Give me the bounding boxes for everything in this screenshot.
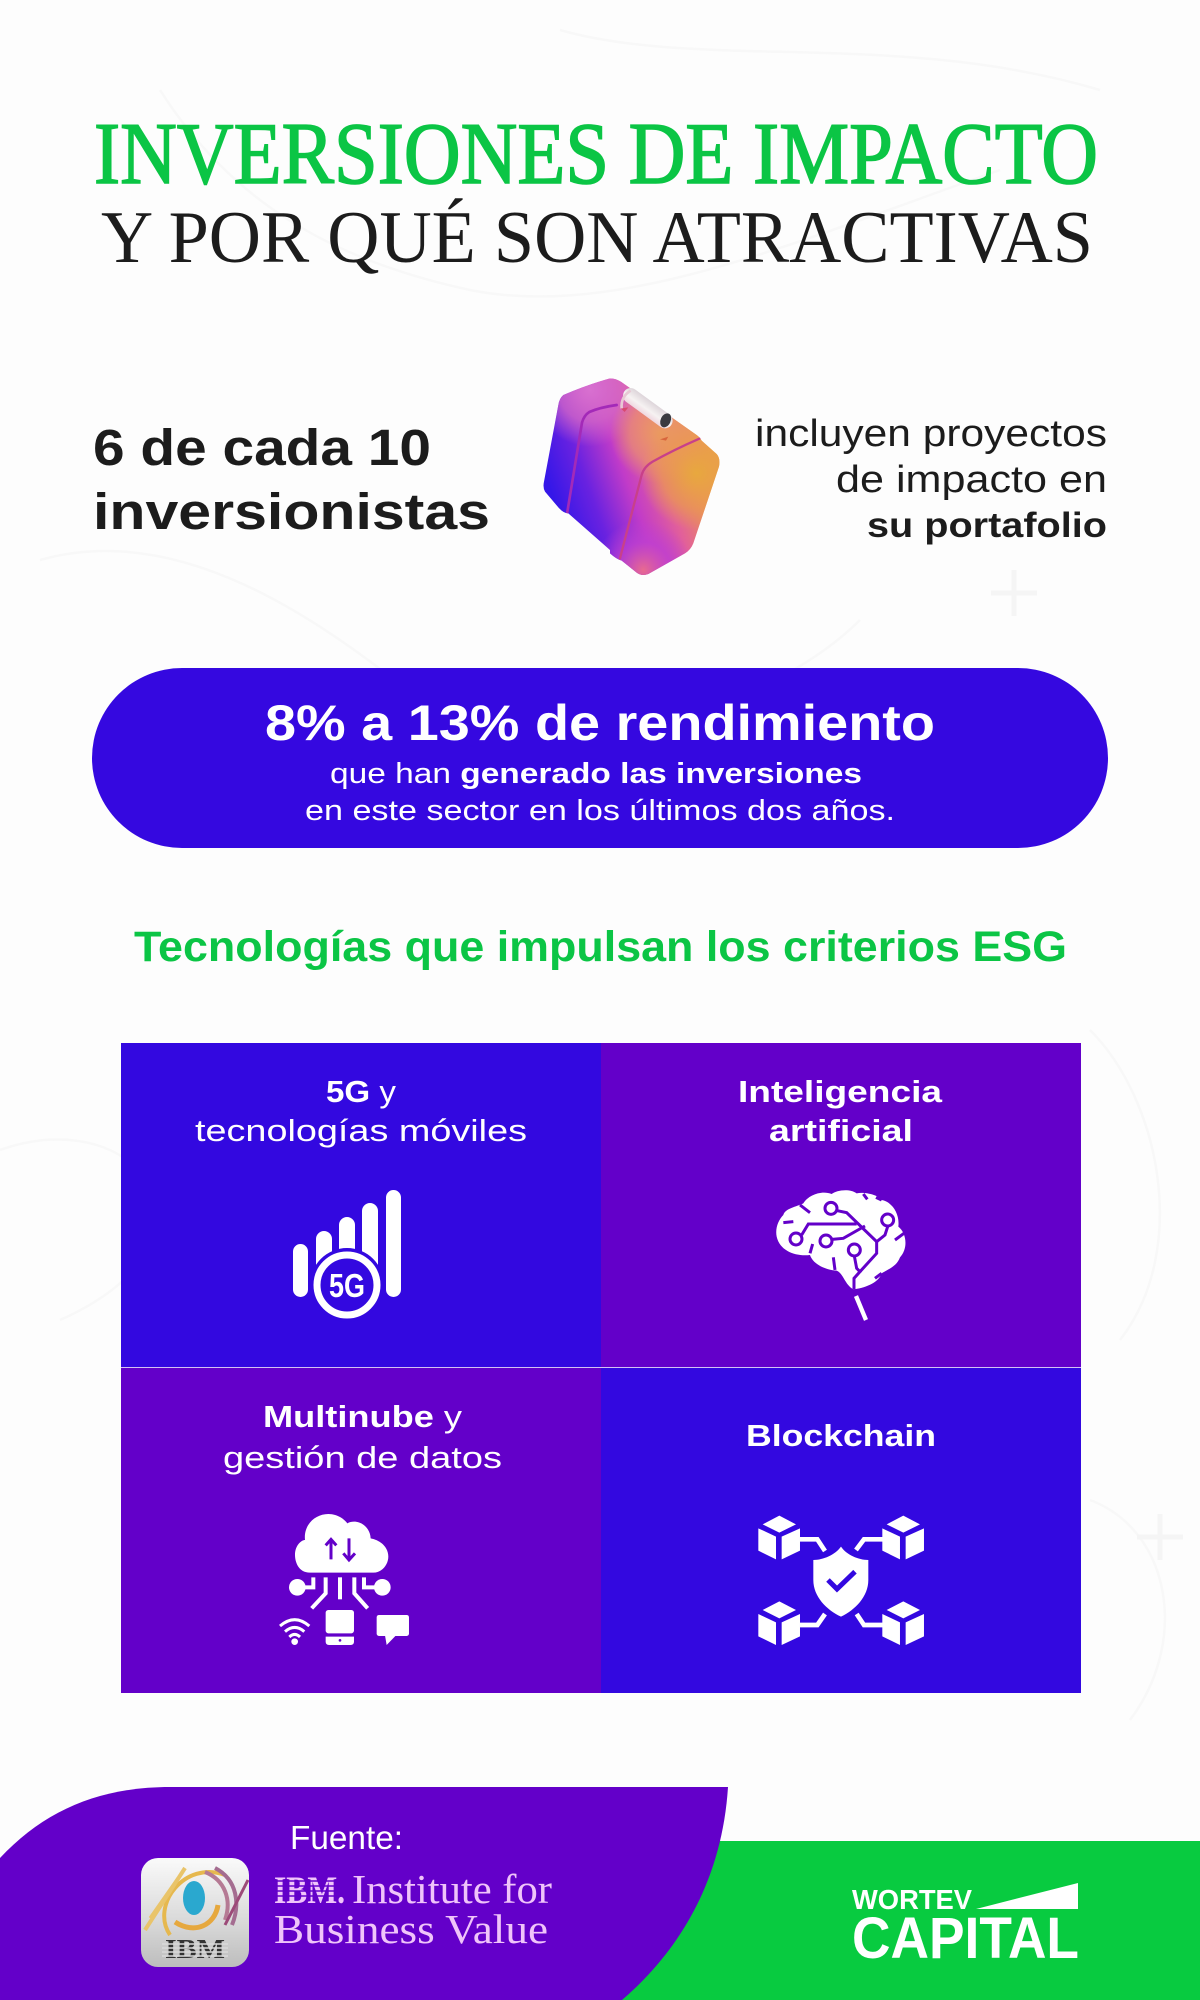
cell: AI xyxy=(601,1043,1081,1367)
cell: blockchain: Blockchain xyxy=(746,1418,936,1453)
cell: 5G: 5G y xyxy=(326,1074,397,1109)
logo: Wortev Capital: CAPITAL xyxy=(852,1906,1079,1971)
title line 1: INVERSIONES DE IMPACTO xyxy=(94,106,1098,203)
cell: multicloud: Multinube y xyxy=(263,1399,463,1434)
stat: investors: 6 de cada 10 xyxy=(93,419,431,476)
stat: investors: inversionistas xyxy=(93,483,490,540)
icon: IBM app xyxy=(141,1858,249,1967)
logo: Wortev Capital xyxy=(852,1883,1079,1971)
panel: return callout: 8% a 13% de rendimiento xyxy=(265,695,935,751)
icon: briefcase xyxy=(544,378,720,575)
cell: 5G: tecnologías móviles xyxy=(195,1113,527,1148)
cell: AI: artificial xyxy=(769,1113,913,1148)
cell: multicloud: gestión de datos xyxy=(223,1440,502,1475)
panel: return callout xyxy=(92,668,1108,848)
footer: green band xyxy=(560,1841,1200,2000)
icon: blockchain shield xyxy=(758,1516,924,1645)
title line 2: Y POR QUÉ SON ATRACTIVAS xyxy=(101,197,1093,279)
text: IBM institute xyxy=(272,1866,552,1952)
icon: brain xyxy=(776,1190,905,1320)
logo: Wortev Capital: WORTEV xyxy=(852,1884,972,1915)
panel: technologies grid xyxy=(121,1043,1081,1693)
panel: return callout: que han generado las inversiones xyxy=(330,758,862,790)
text: portfolio: de impacto en xyxy=(836,459,1107,501)
icon: cloud data xyxy=(280,1514,409,1645)
text: IBM institute: Institute for xyxy=(352,1866,552,1912)
text: portfolio xyxy=(755,413,1107,545)
icon: 5G signal xyxy=(293,1190,401,1322)
cell: blockchain xyxy=(601,1368,1081,1693)
cell: multicloud xyxy=(121,1368,601,1693)
heading: technologies: Tecnologías que impulsan los criterios ESG xyxy=(134,923,1067,971)
panel: return callout: en este sector en los últimos dos años. xyxy=(305,795,895,827)
text: IBM institute: Business Value xyxy=(274,1906,548,1952)
title xyxy=(94,106,1098,279)
cell: 5G xyxy=(121,1043,601,1367)
text: IBM institute: IBM. xyxy=(274,1869,345,1912)
text: portfolio: su portafolio xyxy=(867,506,1107,545)
footer: source panel xyxy=(0,1787,728,2000)
stat: investors xyxy=(93,419,490,540)
icon: IBM app: IBM xyxy=(165,1934,225,1964)
cell: AI: Inteligencia xyxy=(738,1074,943,1109)
footer: source panel: Fuente: xyxy=(290,1819,403,1856)
text: portfolio: incluyen proyectos xyxy=(755,413,1107,455)
icon: 5G signal: 5G xyxy=(329,1267,365,1304)
